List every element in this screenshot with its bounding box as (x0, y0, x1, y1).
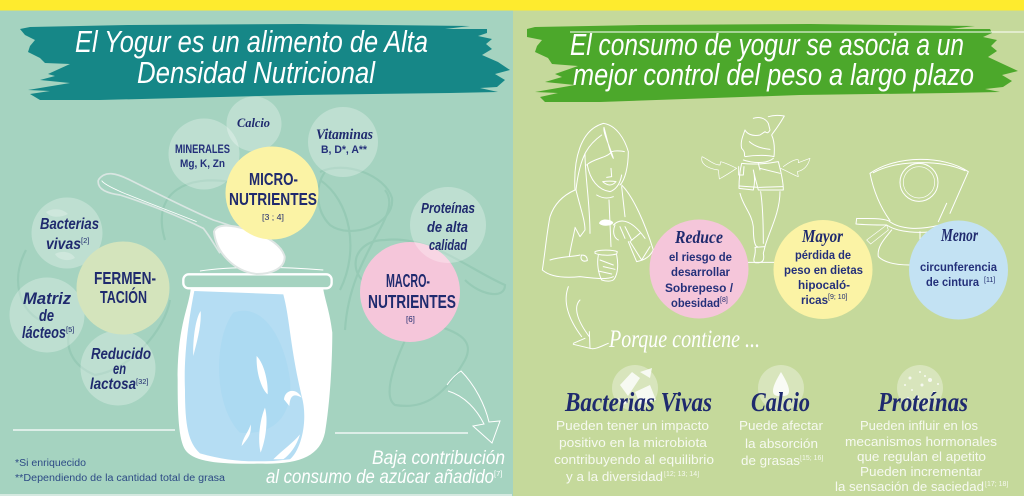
bubble: reducido en lactosa: Reducido (91, 346, 151, 363)
bubble: mayor: ricas (801, 295, 828, 307)
bubble: matriz de lácteos (10, 278, 84, 352)
bubble: mayor: hipocaló- (798, 280, 850, 292)
bubble: mayor: peso en dietas (784, 265, 863, 277)
heading brush: right (527, 24, 1018, 102)
bubble: minerales (168, 118, 240, 190)
bubble: fermentación: FERMEN- (94, 268, 156, 288)
block: proteínas: Proteínas (877, 387, 968, 417)
bubble: reducido en lactosa: [32] (136, 377, 149, 386)
footnotes: *Si enriquecido (15, 458, 86, 469)
bubble: fermentación: TACIÓN (100, 286, 147, 307)
background swirls (18, 168, 505, 406)
bubble: matriz de lácteos: lácteos (22, 324, 66, 342)
block: proteínas: Pueden incrementar (860, 465, 982, 479)
icon: body measuring (702, 115, 810, 263)
bubble: bacterias vivas: Bacterias (40, 216, 99, 233)
callout: low sugar contribution: [7] (494, 469, 502, 478)
callout: low sugar contribution: al consumo de azúcar añadido (266, 467, 494, 488)
bubble: calcio (226, 96, 282, 152)
top yellow bar (0, 0, 1024, 10)
block: bacterias vivas: positivo en la microbiota (559, 436, 707, 450)
bubble: matriz de lácteos: de (39, 307, 54, 325)
block: bacterias vivas: contribuyendo al equilibrio (554, 453, 714, 467)
bubble: reducido en lactosa (80, 330, 156, 406)
bubble: macronutrientes: [6] (406, 315, 415, 324)
title: left (75, 24, 428, 90)
block: bacterias vivas (554, 387, 714, 484)
bubble: minerales: MINERALES (175, 144, 230, 156)
footnotes: **Dependiendo de la cantidad total de grasa (15, 473, 225, 484)
bubble: bacterias vivas (32, 198, 102, 268)
block: proteínas: la sensación de saciedad (835, 480, 984, 494)
panel: weight control (512, 10, 1024, 496)
icon: yogurt jar (178, 267, 332, 464)
bubble: menor: Menor (940, 225, 979, 245)
block: bacterias vivas: Bacterias Vivas (564, 387, 712, 417)
bubble: proteínas: calidad (429, 237, 468, 254)
callout: low sugar contribution: Baja contribución (372, 448, 505, 469)
bubble: bacterias vivas: [2] (81, 236, 89, 245)
bubble: macronutrientes: MACRO- (386, 271, 430, 291)
block: proteínas: mecanismos hormonales (845, 435, 997, 449)
subheading: Porque contiene ... (608, 326, 760, 353)
bubble: reduce (650, 220, 748, 318)
bubble: proteínas (410, 187, 486, 263)
icon: drop (758, 365, 804, 411)
bubble: reducido en lactosa: en (113, 361, 126, 378)
bubble: reduce: Sobrepeso / (665, 283, 734, 295)
panel edge line (570, 31, 1024, 33)
block: proteínas (835, 387, 1008, 494)
icon: protein particles (897, 365, 943, 411)
bubble: calcio: Calcio (237, 115, 270, 130)
bubble: minerales: Mg, K, Zn (180, 158, 225, 170)
block: calcio: Calcio (751, 387, 810, 417)
divider lines (13, 430, 468, 433)
block: calcio (739, 387, 823, 468)
block: calcio: de grasas (741, 454, 800, 468)
bubble: micronutrientes: MICRO- (249, 169, 298, 189)
bubble: matriz de lácteos: Matriz (23, 290, 72, 308)
block: proteínas: Pueden influir en los (860, 419, 978, 433)
bubble: menor: [11] (984, 277, 995, 284)
bubble: menor: de cintura (926, 277, 980, 289)
title: right (570, 27, 974, 92)
bubble: matriz de lácteos: [5] (66, 325, 74, 334)
icon: spoon (98, 174, 285, 274)
bubble: reduce: [8] (720, 297, 728, 304)
block: bacterias vivas: [12; 13; 14] (664, 471, 699, 478)
block: calcio: la absorción (745, 437, 818, 451)
block: bacterias vivas: Pueden tener un impacto (556, 419, 709, 433)
bubble: macronutrientes: NUTRIENTES (368, 292, 456, 312)
block: calcio: [15; 16] (800, 455, 823, 462)
bubble: micronutrientes: [3 ; 4] (262, 213, 284, 222)
bubble: mayor: [9; 10] (828, 294, 848, 301)
bubble: mayor (774, 220, 872, 319)
bubble: micronutrientes (226, 146, 318, 240)
bubble: macronutrientes (360, 242, 460, 342)
footnotes (15, 458, 225, 484)
panel: nutritional density (0, 10, 512, 496)
bubble: vitaminas (308, 107, 378, 177)
bubble: proteínas: Proteínas (421, 200, 475, 217)
bubble: micronutrientes: NUTRIENTES (229, 189, 317, 209)
heading brush: left (20, 24, 510, 100)
title: left: Densidad Nutricional (137, 55, 376, 90)
bubble: vitaminas: B, D*, A** (321, 144, 368, 156)
bubble: reduce: desarrollar (671, 267, 731, 279)
icon: bacteria (612, 365, 658, 411)
title: left: El Yogur es un alimento de Alta (75, 24, 428, 59)
bubble: mayor: pérdida de (795, 250, 851, 262)
bubble: bacterias vivas: vivas (46, 236, 81, 253)
bubble: reduce: obesidad (671, 298, 720, 310)
bubble: reduce: Reduce (674, 227, 723, 247)
bubble: menor: circunferencia (920, 262, 998, 274)
bubble: fermentación (76, 242, 170, 334)
block: proteínas: [17; 18] (985, 481, 1008, 488)
bubble: proteínas: de alta (427, 219, 468, 236)
bubble: mayor: Mayor (801, 226, 844, 246)
icon: scale and tape (856, 159, 968, 265)
icon: woman eating yogurt (542, 123, 653, 349)
bubble: menor (909, 220, 1008, 320)
callout: low sugar contribution (266, 448, 505, 488)
arrow: low sugar (447, 371, 500, 443)
bubble: reducido en lactosa: lactosa (90, 376, 136, 393)
block: calcio: Puede afectar (739, 419, 823, 433)
bubble: vitaminas: Vitaminas (316, 127, 373, 143)
block: proteínas: que regulan el apetito (857, 450, 986, 464)
bubble: reduce: el riesgo de (669, 252, 732, 264)
block: bacterias vivas: y a la diversidad (566, 470, 663, 484)
